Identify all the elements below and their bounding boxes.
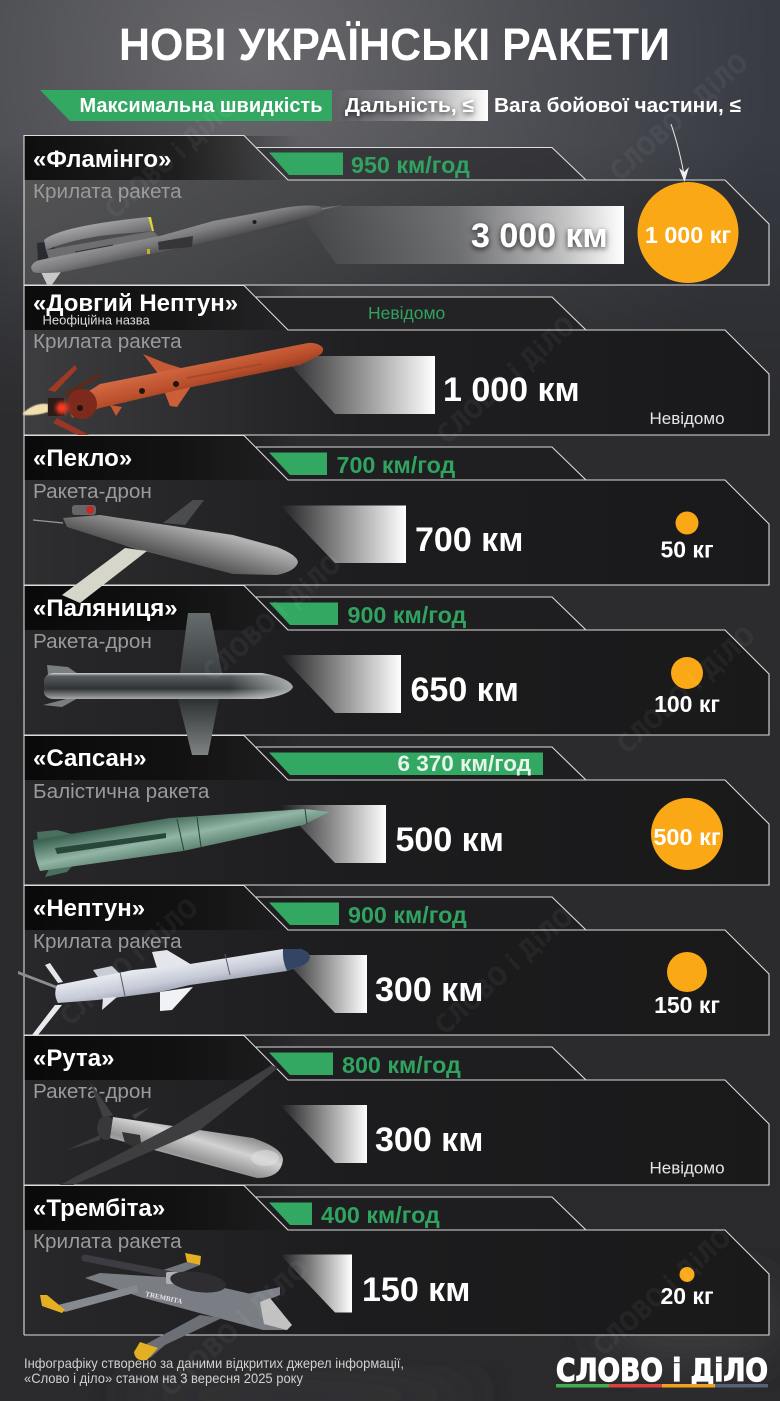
watermarks: СЛОВО і ДіЛО (430, 902, 580, 1041)
missile name: «Сапсан» (33, 745, 147, 772)
range bar (280, 1105, 367, 1163)
watermarks: СЛОВО і ДіЛО (155, 1254, 316, 1401)
watermarks: СЛОВО і ДіЛО (432, 311, 582, 450)
warhead value: 500 кг (653, 824, 721, 850)
legend: warhead label: Вага бойової частини, ≤ (494, 95, 741, 117)
watermarks: СЛОВО і ДіЛО (55, 893, 205, 1032)
panel shape (24, 1186, 769, 1335)
panel shape (24, 286, 769, 435)
missile name: «Рута» (33, 1045, 114, 1072)
warhead value: Невідомо (649, 409, 725, 428)
warhead value: Невідомо (649, 1158, 725, 1178)
warhead circle (638, 182, 738, 283)
panel: Сапсан (24, 699, 769, 885)
tab outline (24, 286, 769, 435)
Peklo lower wing overlapping row (62, 548, 147, 603)
missile name: «Довгий Нептун» (33, 290, 238, 317)
speed bar (269, 1052, 333, 1075)
missile type: Ракета-дрон (33, 630, 152, 653)
watermarks: СЛОВО і ДіЛО (605, 48, 755, 187)
warhead value: 150 кг (654, 992, 720, 1018)
panel: Нептун (18, 886, 769, 1035)
missile type: Крилата ракета (33, 180, 182, 203)
missile name: «Фламінго» (33, 146, 171, 173)
missile type: Балістична ракета (33, 780, 210, 803)
missile name: «Пекло» (33, 445, 132, 472)
panel: Рута (24, 1036, 769, 1190)
missile: Long Neptune (23, 343, 323, 445)
range value: 300 км (375, 1121, 483, 1159)
speed bar (269, 1202, 312, 1225)
speed tab (256, 447, 586, 480)
missile: Trembita: TREMBITA (145, 1290, 183, 1306)
speed value: Невідомо (368, 303, 445, 323)
missile type: Крилата ракета (33, 330, 182, 353)
range bar (296, 206, 624, 264)
missile name: «Паляниця» (33, 595, 178, 622)
warhead circle (671, 657, 703, 689)
speed value: 400 км/год (321, 1202, 440, 1228)
speed bar (269, 152, 343, 175)
warhead circle (667, 952, 707, 992)
speed tab (256, 597, 586, 630)
missile: Trembita (40, 1253, 292, 1360)
panel shape (24, 136, 769, 285)
speed tab (256, 1047, 586, 1080)
range value: 700 км (415, 521, 523, 559)
legend: speed (40, 90, 332, 121)
name band (24, 886, 302, 930)
speed value: 900 км/год (348, 602, 467, 628)
panel shape (24, 886, 769, 1035)
title: НОВІ УКРАЇНСЬКІ РАКЕТИ (119, 19, 670, 70)
missile: Peklo (33, 500, 298, 575)
speed tab (256, 1197, 586, 1230)
speed bar (269, 602, 338, 625)
range bar (280, 655, 401, 713)
range bar (280, 506, 406, 563)
missile type: Крилата ракета (33, 930, 182, 953)
missile: Sapsan (33, 809, 330, 877)
range value: 3 000 км (471, 217, 608, 255)
speed bar (269, 452, 327, 475)
watermarks: СЛОВО і ДіЛО (198, 549, 348, 688)
name band (24, 286, 302, 330)
name band (24, 136, 302, 180)
missile type: Крилата ракета (33, 1230, 182, 1253)
footer note: Інфографіку створено за даними відкритих джерел інформації, (24, 1355, 404, 1371)
range bar (282, 356, 435, 414)
panel shape (24, 1036, 769, 1185)
speed tab (256, 897, 586, 930)
missile: Palianytsia (43, 613, 293, 707)
panel: Трембіта (24, 1186, 769, 1360)
speed tab (256, 148, 586, 180)
legend (40, 90, 741, 121)
legend: range label: Дальність, ≤ (345, 95, 474, 117)
name band (24, 736, 302, 780)
speed value: 6 370 км/год (398, 751, 531, 776)
arrow: legend to warhead circle (671, 124, 689, 182)
missile type: Ракета-дрон (33, 480, 152, 503)
watermarks: СЛОВО і ДіЛО (588, 1223, 738, 1362)
Palianytsia lower wing overlapping rows (178, 699, 219, 755)
speed tab (256, 297, 586, 330)
tab outline (24, 886, 769, 1035)
warhead value: 50 кг (660, 536, 714, 562)
missile name: «Нептун» (33, 895, 145, 922)
missile type: Ракета-дрон (33, 1080, 152, 1103)
name band (24, 1036, 302, 1080)
tab outline (24, 1186, 769, 1335)
unofficial name note: Неофіційна назва (42, 312, 151, 328)
tab outline (24, 136, 769, 285)
watermarks: СЛОВО і ДіЛО (100, 93, 242, 225)
tab outline (24, 736, 769, 885)
panel: Довгий Нептун (23, 286, 769, 445)
speed bar (269, 902, 339, 925)
speed tab (256, 747, 586, 780)
speed value: 800 км/год (342, 1052, 461, 1078)
speed value: 900 км/год (348, 902, 467, 928)
legend: speed label: Максимальна швидкість (80, 95, 322, 117)
warhead circle (680, 1267, 694, 1282)
range value: 650 км (410, 671, 519, 709)
tab outline (24, 586, 769, 735)
missile name: «Трембіта» (33, 1195, 165, 1222)
range value: 500 км (396, 821, 504, 859)
tab outline (24, 1036, 769, 1185)
tab outline (24, 436, 769, 585)
range bar (280, 1254, 352, 1312)
legend: range (333, 90, 488, 121)
name band (24, 586, 302, 630)
panel shape (24, 586, 769, 735)
warhead circle (676, 512, 698, 534)
warhead value: 20 кг (660, 1283, 714, 1309)
panel: Паляниця (24, 548, 769, 735)
speed value: 950 км/год (351, 152, 470, 178)
panel: Фламінго (24, 136, 769, 289)
range value: 150 км (362, 1271, 470, 1309)
panel shape (24, 736, 769, 885)
speed value: 700 км/год (336, 452, 456, 478)
speed bar (269, 752, 543, 775)
footer note (24, 1355, 404, 1386)
missile: Ruta (50, 1065, 283, 1190)
warhead value: 100 кг (654, 691, 720, 717)
range value: 1 000 км (443, 371, 580, 409)
warhead circle (651, 798, 723, 870)
missile: Flamingo (31, 205, 343, 289)
panel shape (24, 436, 769, 585)
range bar (280, 805, 386, 863)
name band (24, 436, 302, 480)
footer note: «Слово і діло» станом на 3 вересня 2025 року (24, 1370, 303, 1386)
panel: Пекло (24, 436, 769, 585)
range value: 300 км (375, 971, 483, 1009)
name band (24, 1186, 302, 1230)
range bar (280, 955, 367, 1013)
warhead value: 1 000 кг (645, 222, 731, 248)
missile: Neptune (18, 949, 310, 1035)
